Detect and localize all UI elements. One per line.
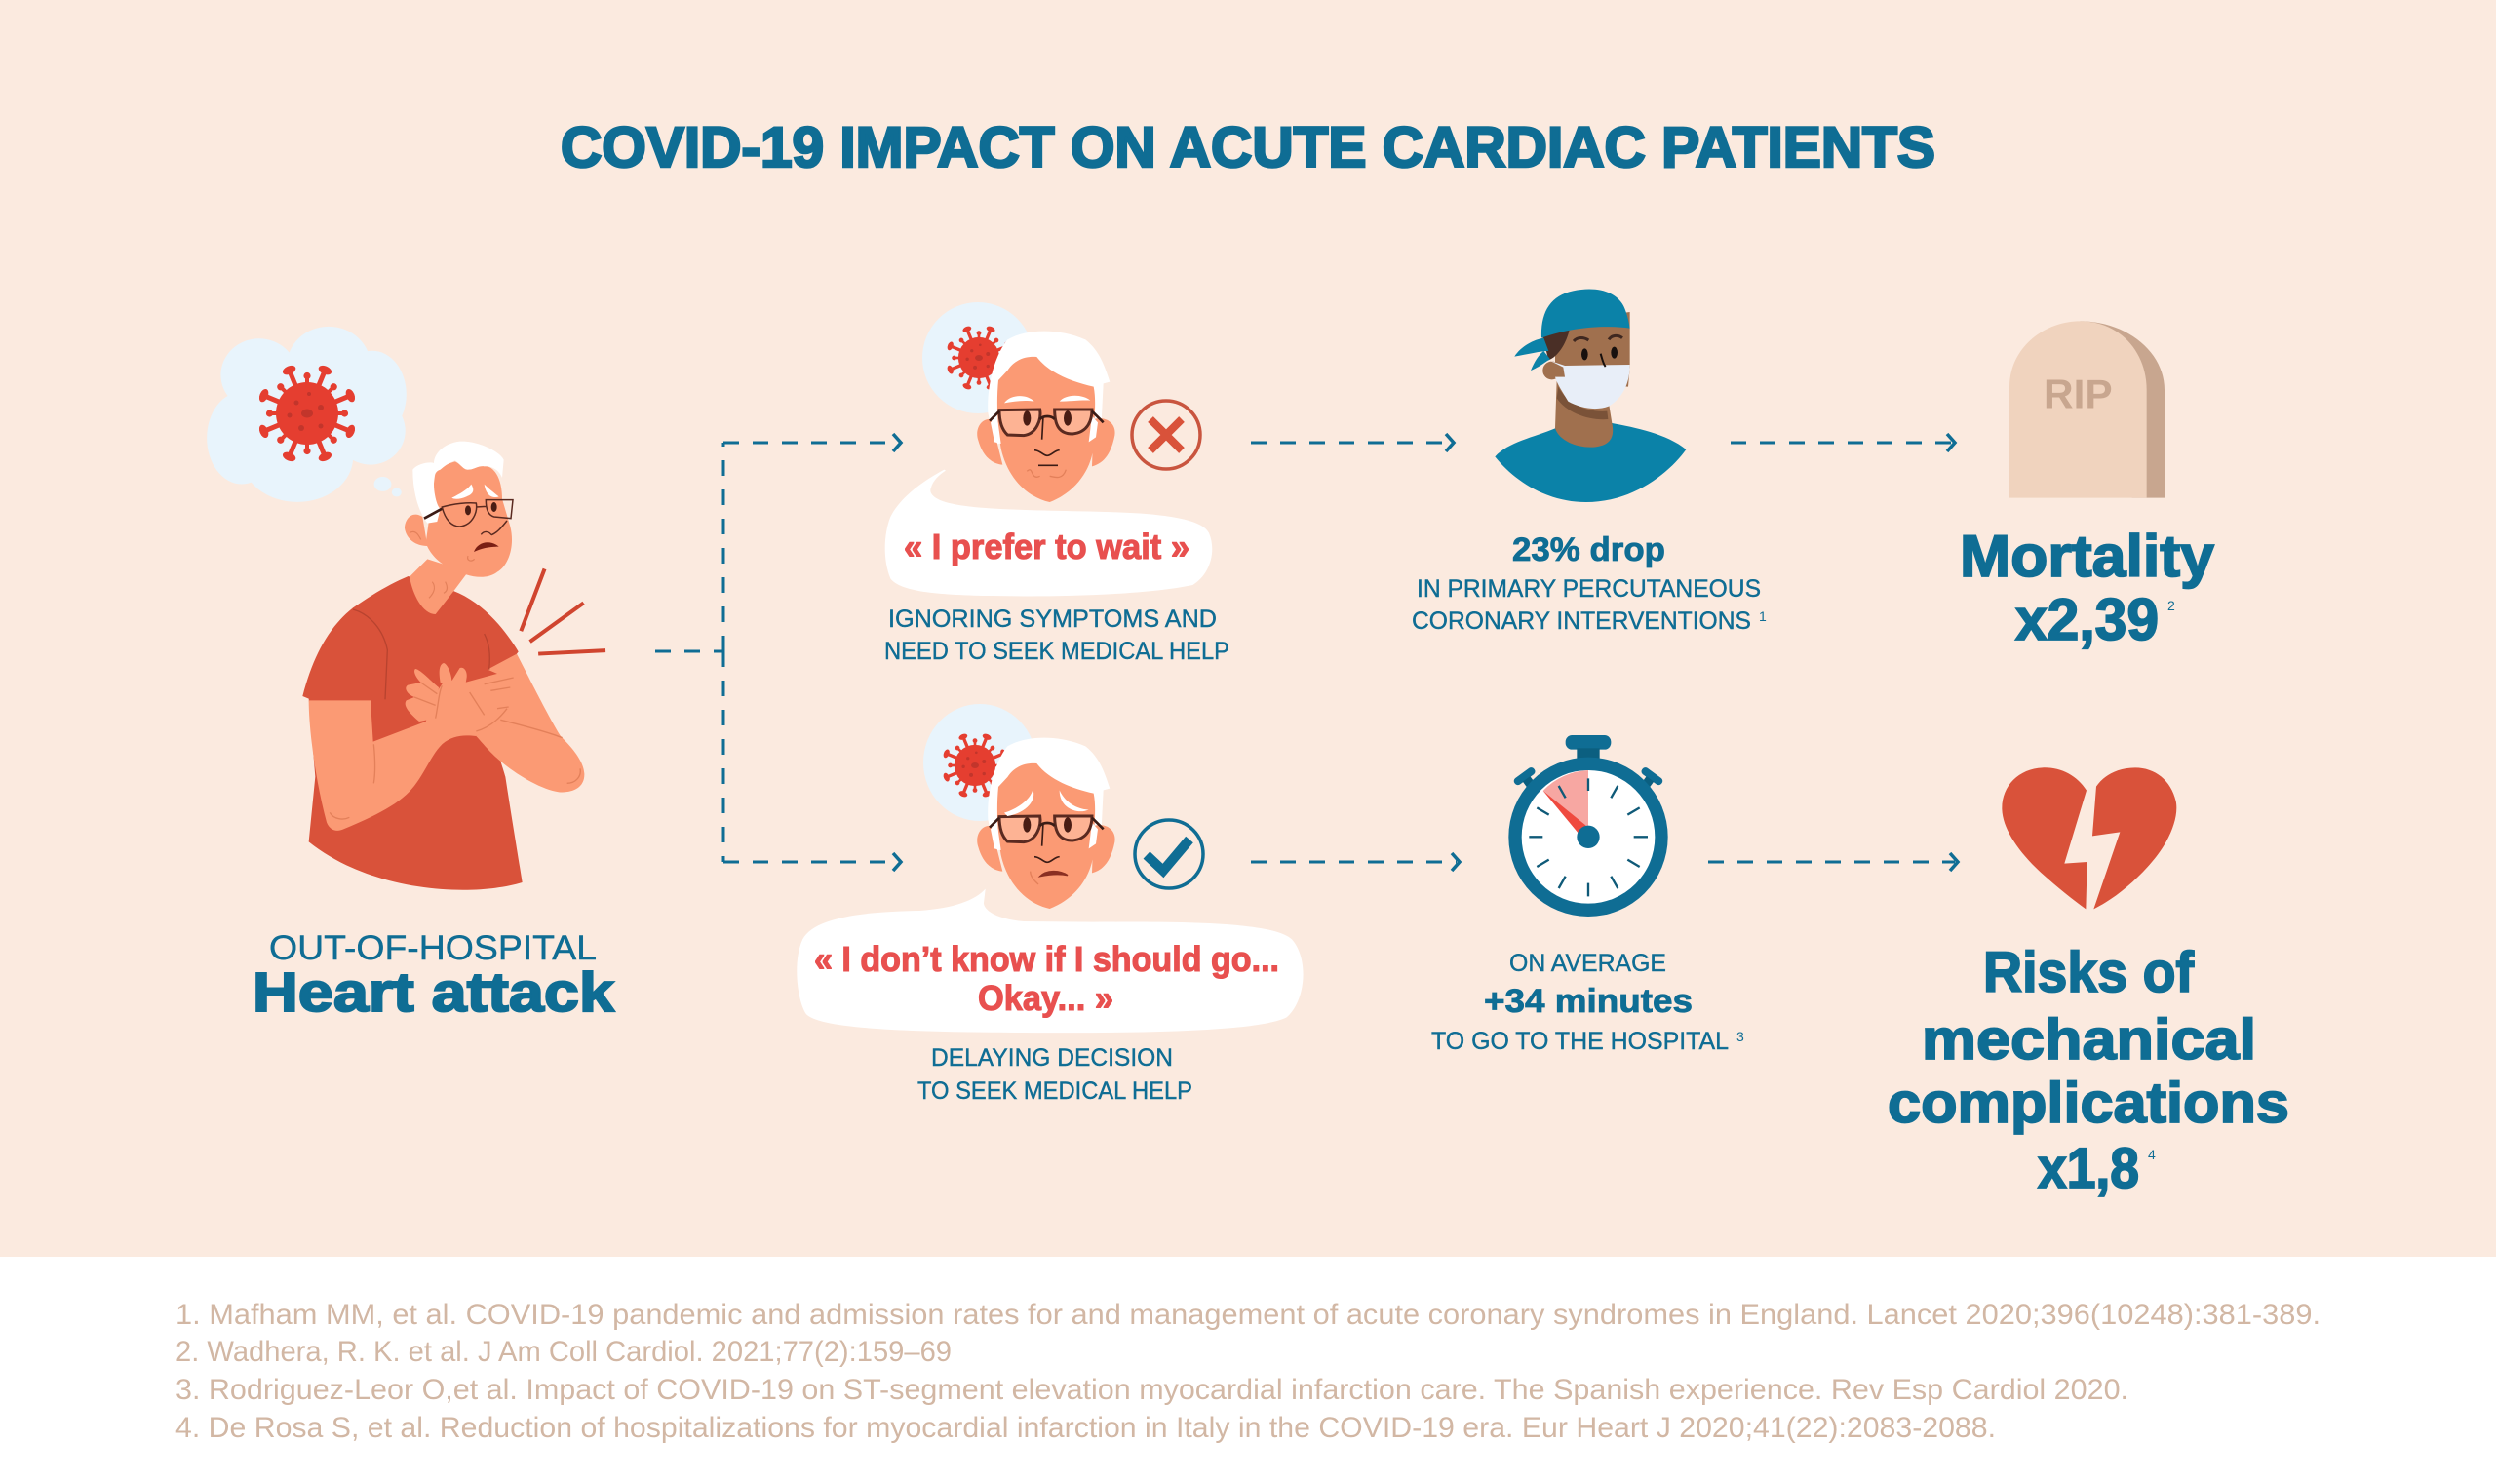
- references: 1. Mafham MM, et al. COVID-19 pandemic and admission rates for and management of acute coronary syndromes in England. Lancet 2020;396(10248):381-389.: [176, 1299, 2320, 1331]
- stat: +34 minutes: +34 minutes: [1484, 983, 1693, 1020]
- icon: red cross: [1132, 401, 1200, 469]
- outcome: mechanical complications: x1,8: [2038, 1137, 2139, 1200]
- caption: ignoring symptoms: IGNORING SYMPTOMS AND: [888, 605, 1217, 633]
- outcome: mortality: Mortality: [1960, 524, 2215, 589]
- panel: row 1 ignoring symptoms: [884, 289, 2215, 665]
- speech bubble: I prefer to wait: [885, 470, 1212, 596]
- thought cloud with virus: [207, 327, 407, 502]
- outcome: mortality: [1960, 524, 2215, 652]
- caption: ignoring symptoms: NEED TO SEEK MEDICAL HELP: [884, 638, 1229, 665]
- label: out-of-hospital heart attack: [253, 929, 614, 1024]
- stat: +34 minutes: ON AVERAGE: [1509, 950, 1666, 977]
- stat: 23% drop: CORONARY INTERVENTIONS: [1412, 607, 1751, 635]
- outcome: mechanical complications: complications: [1888, 1072, 2289, 1135]
- stat: 23% drop: IN PRIMARY PERCUTANEOUS: [1417, 575, 1761, 603]
- speech bubble: I don't know: [797, 889, 1304, 1033]
- torso and arms: [302, 576, 584, 890]
- thought bubble with virus: [923, 704, 1036, 821]
- speech bubble: I prefer to wait: « I prefer to wait »: [904, 527, 1190, 566]
- man illustration: [302, 442, 605, 890]
- arrow to stopwatch: [1251, 853, 1460, 871]
- icon: stopwatch: [1508, 735, 1668, 917]
- outcome: mechanical complications: [1888, 941, 2289, 1200]
- icon: blue check: [1135, 820, 1203, 888]
- caption: ignoring symptoms: [884, 605, 1229, 665]
- outcome: mortality: 2: [2167, 598, 2175, 613]
- icon: masked surgeon: [1495, 289, 1686, 502]
- references: 4. De Rosa S, et al. Reduction of hospitalizations for myocardial infarction in Italy in the COVID-19 era. Eur Heart J 2020;41(22):2083-2088.: [176, 1412, 1996, 1444]
- connector: dashed branches from patient: [655, 434, 901, 871]
- references: 2. Wadhera, R. K. et al. J Am Coll Cardiol. 2021;77(2):159–69: [176, 1336, 952, 1368]
- thought bubble with virus: [922, 302, 1034, 413]
- arrow to surgeon: [1251, 434, 1454, 451]
- label: out-of-hospital heart attack: OUT-OF-HOSPITAL: [269, 929, 597, 967]
- outcome: mortality: x2,39: [2015, 587, 2159, 652]
- caption: delaying decision: [917, 1044, 1192, 1105]
- anxious man face: [977, 738, 1115, 909]
- stat: 23% drop: [1412, 531, 1767, 635]
- caption: delaying decision: DELAYING DECISION: [931, 1044, 1173, 1072]
- references: 3. Rodriguez-Leor O,et al. Impact of COVID-19 on ST-segment elevation myocardial infarction care. The Spanish experience. Rev Esp Cardiol 2020.: [176, 1374, 2128, 1406]
- head with glasses: [405, 442, 513, 614]
- speech bubble: I don't know: Okay... »: [978, 978, 1113, 1018]
- references: [176, 1299, 2320, 1444]
- caption: delaying decision: TO SEEK MEDICAL HELP: [917, 1077, 1192, 1105]
- worried man face: [977, 332, 1115, 502]
- panel: heart attack patient: [207, 327, 614, 1024]
- speech bubble: I don't know: « I don’t know if I should go...: [814, 939, 1279, 979]
- icon: broken heart: [2002, 767, 2176, 909]
- stat: +34 minutes: [1431, 950, 1744, 1055]
- icon: RIP tombstone: RIP: [2044, 371, 2113, 416]
- panel: row 2 delaying decision: [797, 704, 2289, 1200]
- arrow to broken heart: [1708, 853, 1958, 871]
- outcome: mechanical complications: Risks of: [1983, 941, 2195, 1004]
- label: out-of-hospital heart attack: Heart attack: [253, 961, 614, 1024]
- stat: +34 minutes: TO GO TO THE HOSPITAL: [1431, 1028, 1729, 1055]
- stat: +34 minutes: 3: [1736, 1029, 1744, 1044]
- arrow to tombstone: [1731, 434, 1955, 451]
- title: COVID-19 IMPACT ON ACUTE CARDIAC PATIENTS: [561, 116, 1935, 179]
- outcome: mechanical complications: 4: [2148, 1147, 2156, 1162]
- stat: 23% drop: 23% drop: [1512, 531, 1665, 568]
- pain lines: [521, 569, 605, 654]
- icon: RIP tombstone: [2009, 321, 2164, 498]
- stat: 23% drop: 1: [1759, 608, 1767, 624]
- outcome: mechanical complications: mechanical: [1922, 1008, 2256, 1072]
